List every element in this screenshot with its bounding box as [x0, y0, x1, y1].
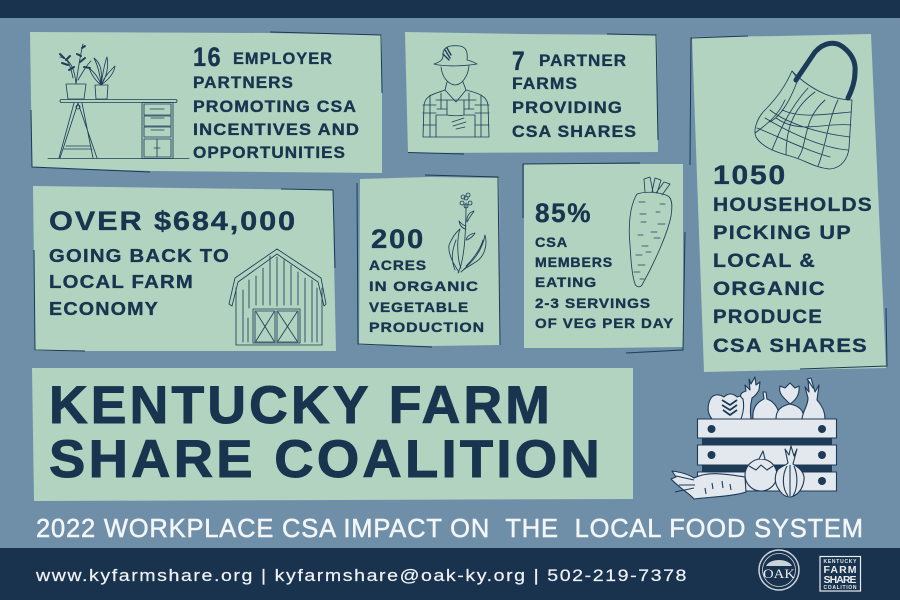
text: over $684,000: [49, 206, 297, 319]
text: over $684,000: OVER $684,000: [49, 206, 297, 236]
logo: Kentucky Farm Share Coalition: KENTUCKY: [824, 559, 857, 565]
panel: organic acres: [357, 175, 500, 347]
text: 16 employer partners: PROMOTING CSA: [193, 98, 357, 116]
text: 16 employer partners: 16: [193, 42, 222, 72]
text: 7 partner farms: FARMS: [512, 75, 578, 93]
logo: Kentucky Farm Share Coalition: COALITION: [824, 585, 857, 591]
icon: vegetable crate: [671, 377, 836, 499]
icon: flower sprig: [449, 193, 486, 273]
logo: Kentucky Farm Share Coalition: FARM: [824, 564, 857, 576]
subtitle: 2022 WORKPLACE CSA IMPACT ON THE LOCAL FOOD SYSTEM: [36, 515, 863, 543]
footer bar: [0, 548, 900, 600]
logo: Kentucky Farm Share Coalition: [820, 556, 860, 591]
text: 200 acres: 200: [371, 224, 425, 254]
text: 1050 households: 1050: [713, 160, 787, 190]
title: SHARE COALITION: [49, 430, 603, 489]
text: 1050 households: HOUSEHOLDS: [713, 194, 873, 216]
text: 200 acres: PRODUCTION: [369, 319, 485, 335]
title: [49, 376, 603, 489]
text: 16 employer partners: [193, 42, 360, 162]
text: 85% csa members: [535, 198, 674, 331]
text: 200 acres: ACRES: [369, 257, 427, 273]
text: 1050 households: CSA SHARES: [713, 335, 868, 357]
text: 16 employer partners: OPPORTUNITIES: [193, 144, 346, 162]
text: 7 partner farms: PROVIDING: [512, 99, 623, 117]
icon: farmer: [423, 46, 489, 137]
text: 7 partner farms: [512, 46, 637, 141]
text: 16 employer partners: EMPLOYER: [233, 50, 333, 68]
icon: carrot: [629, 177, 672, 287]
text: 200 acres: IN ORGANIC: [369, 278, 479, 294]
text: 85% csa members: 2-3 SERVINGS: [535, 296, 651, 311]
icon: desk with plants: [48, 44, 189, 158]
icon: mesh bag: [755, 43, 855, 169]
text: 7 partner farms: PARTNER: [539, 52, 627, 70]
logo: OAK: [759, 550, 799, 590]
text: 200 acres: [369, 224, 485, 335]
logo: OAK: OAK: [763, 566, 796, 581]
panel: households: [690, 34, 887, 372]
text: 16 employer partners: INCENTIVES AND: [193, 121, 360, 139]
text: 1050 households: LOCAL &: [713, 250, 816, 272]
text: 85% csa members: EATING: [535, 275, 597, 290]
text: 85% csa members: CSA: [535, 235, 568, 250]
contact line: www.kyfarmshare.org | kyfarmshare@oak-ky.org | 502-219-7378: [35, 566, 688, 585]
text: over $684,000: GOING BACK TO: [49, 245, 230, 266]
text: 1050 households: PICKING UP: [713, 222, 852, 244]
text: 16 employer partners: PARTNERS: [193, 74, 294, 92]
text: over $684,000: ECONOMY: [49, 298, 159, 319]
text: 200 acres: VEGETABLE: [369, 299, 469, 315]
panel: partner farms: [405, 32, 658, 154]
title: KENTUCKY FARM: [49, 376, 553, 435]
text: 7 partner farms: 7: [512, 46, 526, 76]
text: over $684,000: LOCAL FARM: [49, 271, 194, 292]
panel: servings of veg: [523, 163, 685, 353]
text: 85% csa members: OF VEG PER DAY: [535, 316, 674, 331]
top bar: [0, 0, 900, 18]
icon: barn: [229, 249, 326, 345]
panel: farm economy: [33, 186, 336, 351]
text: 85% csa members: MEMBERS: [535, 255, 613, 270]
text: 1050 households: [713, 160, 873, 357]
text: 1050 households: ORGANIC: [713, 278, 826, 300]
panel: title: [32, 368, 633, 501]
text: 7 partner farms: CSA SHARES: [512, 123, 637, 141]
text: 85% csa members: 85%: [535, 198, 592, 228]
text: 1050 households: PRODUCE: [713, 306, 823, 328]
logo: Kentucky Farm Share Coalition: SHARE: [824, 574, 856, 586]
panel: employer partners: [30, 32, 382, 173]
